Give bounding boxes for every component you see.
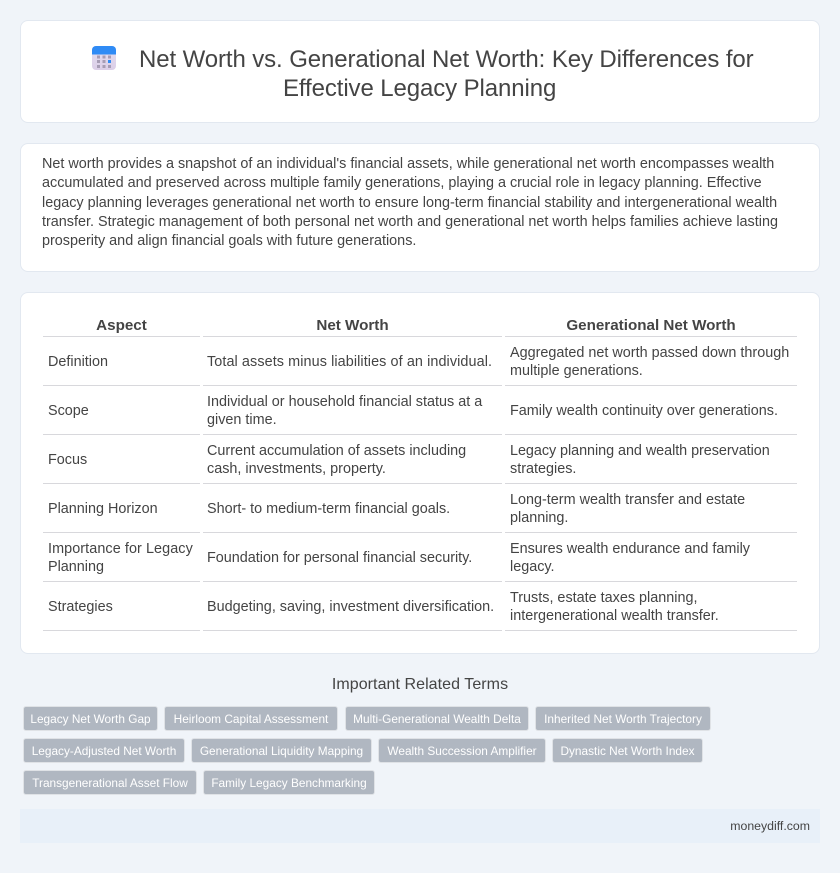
row: strategies [48, 590, 719, 624]
row: definition [48, 345, 789, 379]
row: scope: given time. [207, 412, 277, 428]
table header: Generational Net Worth [566, 317, 736, 334]
row: importance for legacy planning: Importance for Legacy [48, 541, 193, 557]
row: focus [48, 443, 770, 477]
row: planning horizon: Planning Horizon [48, 501, 158, 517]
row: focus: strategies. [510, 461, 576, 477]
panel: related term tags: Family Legacy Benchmarking [211, 776, 367, 790]
row: definition: Aggregated net worth passed down through [510, 345, 789, 361]
panel: related term tags: Heirloom Capital Assessment [174, 712, 328, 726]
heading: important related terms: Important Related Terms [332, 676, 508, 693]
row: importance for legacy planning [48, 541, 750, 575]
row: focus: Focus [48, 452, 87, 468]
panel: related term tags: Generational Liquidity Mapping [200, 744, 363, 758]
panel: related term tags: Transgenerational Asset Flow [32, 776, 188, 790]
row: strategies: Budgeting, saving, investment diversification. [207, 599, 494, 615]
row: focus: Legacy planning and wealth preservation [510, 443, 770, 459]
row: importance for legacy planning: legacy. [510, 559, 555, 575]
table header [96, 317, 736, 334]
row: definition: multiple generations. [510, 363, 643, 379]
row: scope: Family wealth continuity over generations. [510, 403, 778, 419]
row: definition: Definition [48, 354, 108, 370]
panel: comparison table [20, 292, 820, 654]
panel: related term tags: Inherited Net Worth Trajectory [544, 712, 702, 726]
summary text: legacy planning leverages generational net worth to ensure long-term financial stability and intergenerational wealth [42, 195, 777, 211]
row: planning horizon: Short- to medium-term financial goals. [207, 501, 450, 517]
row: planning horizon: planning. [510, 510, 568, 526]
row: planning horizon: Long-term wealth transfer and estate [510, 492, 745, 508]
panel: summary [20, 143, 820, 272]
row: importance for legacy planning: Planning [48, 559, 104, 575]
panel: header [20, 20, 820, 123]
icon: calendar [92, 46, 116, 70]
summary text: Net worth provides a snapshot of an individual's financial assets, while generational net worth encompasses wealth [42, 156, 774, 172]
row: focus: Current accumulation of assets including [207, 443, 466, 459]
row: importance for legacy planning: Ensures wealth endurance and family [510, 541, 750, 557]
row: importance for legacy planning: Foundation for personal financial security. [207, 550, 472, 566]
summary text: accumulated and preserved across multiple family generations, playing a crucial role in legacy planning. Effective [42, 175, 762, 191]
summary text [42, 156, 778, 249]
row: planning horizon [48, 492, 745, 526]
row: strategies: Trusts, estate taxes planning, [510, 590, 697, 606]
panel: related term tags: Legacy Net Worth Gap [30, 712, 151, 726]
table header: Net Worth [316, 317, 389, 334]
title line 2: Effective Legacy Planning [283, 75, 556, 102]
footer [20, 809, 820, 843]
table header: Aspect [96, 317, 147, 334]
row: scope: Individual or household financial status at a [207, 394, 482, 410]
panel: related term tags: Multi-Generational Wealth Delta [353, 712, 521, 726]
row: definition: Total assets minus liabilities of an individual. [207, 354, 492, 370]
title line 1: Net Worth vs. Generational Net Worth: Key Differences for [139, 46, 754, 73]
row: focus: cash, investments, property. [207, 461, 386, 477]
footer source: moneydiff.com [730, 819, 810, 833]
panel: related term tags: Dynastic Net Worth Index [560, 744, 695, 758]
row: scope [48, 394, 778, 428]
row: strategies: intergenerational wealth transfer. [510, 608, 719, 624]
panel: related term tags: Legacy-Adjusted Net Worth [32, 744, 176, 758]
panel: related term tags [23, 706, 711, 795]
panel: related term tags: Wealth Succession Amplifier [387, 744, 537, 758]
row: scope: Scope [48, 403, 89, 419]
row: strategies: Strategies [48, 599, 113, 615]
summary text: transfer. Strategic management of both personal net worth and generational net worth helps families achieve lasting [42, 214, 778, 230]
summary text: prosperity and align financial goals with future generations. [42, 233, 416, 249]
